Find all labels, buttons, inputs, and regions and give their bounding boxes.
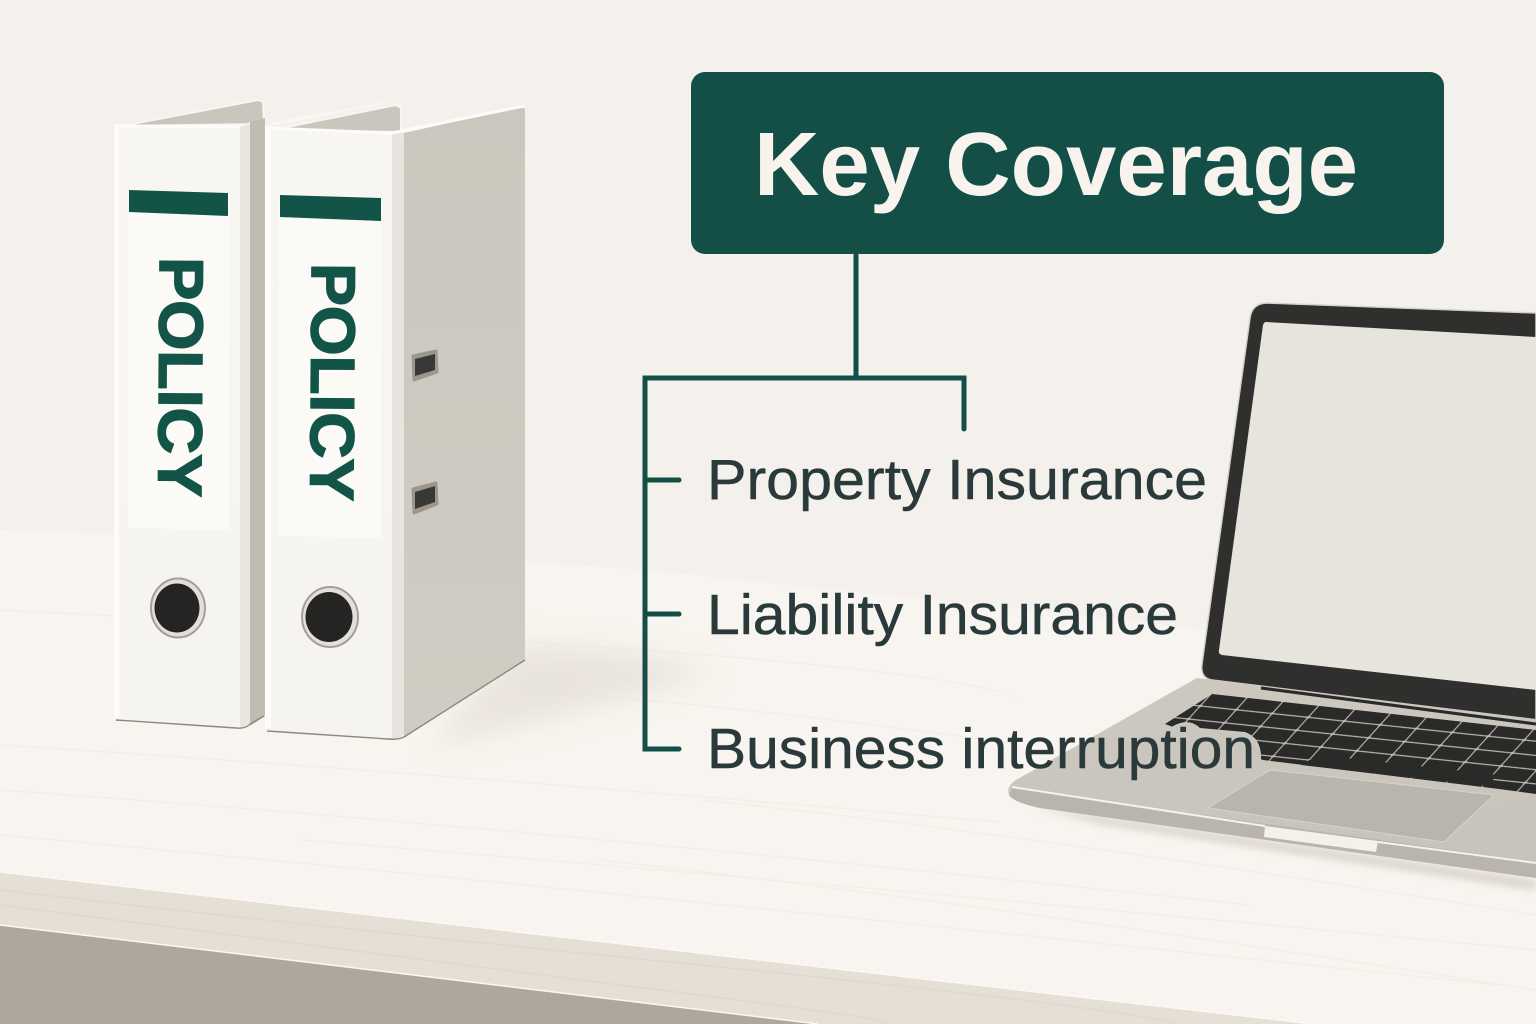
binder 2 spine xyxy=(265,127,393,738)
binder 1 xyxy=(114,100,265,728)
binder cast shadow xyxy=(430,645,715,745)
desk front edge xyxy=(0,872,1313,1024)
binder 1 back cover xyxy=(122,100,264,126)
title text: Key Coverage xyxy=(754,115,1358,215)
laptop screen xyxy=(1219,322,1536,690)
binder 1 POLICY text: POLICY xyxy=(144,257,215,497)
binder 1 finger ring xyxy=(151,578,205,638)
binder 2 rivet slot upper xyxy=(413,351,437,380)
laptop space bar xyxy=(1301,755,1499,786)
coverage list item: liability insurance: Liability Insurance xyxy=(707,583,1178,647)
laptop trackpad xyxy=(1208,770,1494,842)
coverage list item: property insurance: Property Insurance xyxy=(707,448,1207,512)
binder 1 spine edge xyxy=(240,124,250,728)
tree connector lines xyxy=(645,254,964,749)
laptop keyboard xyxy=(1165,694,1536,794)
binder 2 spine edge xyxy=(392,131,404,739)
desk underside xyxy=(0,925,818,1024)
binder 1 label bar xyxy=(129,190,228,216)
desk wood grain xyxy=(0,610,1536,990)
laptop front notch xyxy=(1264,826,1378,852)
laptop hinge strip xyxy=(1261,688,1536,724)
binder 2 xyxy=(265,103,525,739)
desk edge highlights xyxy=(0,872,1313,1024)
binder 2 label xyxy=(279,195,381,538)
laptop shadow xyxy=(1030,806,1536,890)
binder 1 side xyxy=(250,118,265,726)
laptop front lip xyxy=(1009,788,1536,878)
desk xyxy=(0,530,1536,1024)
desk top surface xyxy=(0,530,1536,1024)
title box xyxy=(691,72,1444,254)
binder 2 finger ring xyxy=(302,587,358,647)
binder 2 back cover xyxy=(265,103,386,126)
binder 2 label bar xyxy=(280,195,381,221)
laptop base xyxy=(1008,678,1536,878)
binder 2 POLICY text: POLICY xyxy=(296,263,367,501)
binder 1 label xyxy=(128,190,229,530)
binder 2 rivet slot lower xyxy=(413,483,437,513)
halo behind label text xyxy=(1140,722,1261,778)
binder 1 spine xyxy=(114,122,250,728)
laptop lid xyxy=(1202,303,1536,720)
binder 2 side xyxy=(404,107,525,738)
coverage list item: business interruption: Business interruption xyxy=(707,717,1255,781)
laptop xyxy=(1008,303,1536,878)
